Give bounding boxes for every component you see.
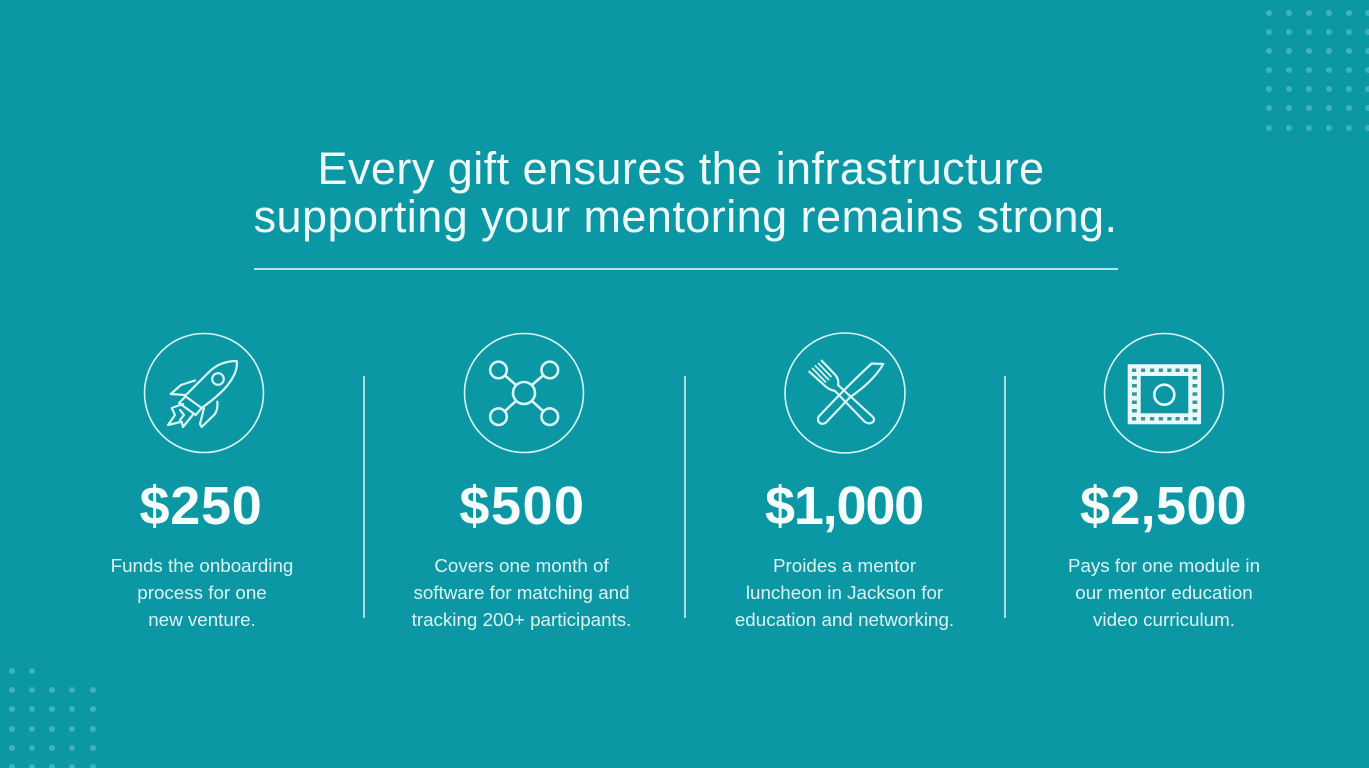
description: $250 bbox=[111, 555, 293, 630]
icon: rocket bbox=[144, 334, 264, 452]
amount: $1,000: $1,000 bbox=[765, 476, 923, 536]
description: $250: new venture. bbox=[148, 609, 256, 630]
description: $500: software for matching and bbox=[413, 582, 630, 603]
dot grid: top right bbox=[1266, 10, 1369, 131]
dot grid: bottom left bbox=[9, 668, 96, 768]
description: $500: Covers one month of bbox=[434, 555, 609, 576]
description: $1,000: luncheon in Jackson for bbox=[746, 582, 943, 603]
icon: network bbox=[464, 334, 584, 452]
amount: $2,500: $2,500 bbox=[1080, 476, 1247, 536]
title: supporting your mentoring remains strong. bbox=[254, 191, 1117, 242]
description: $2,500: Pays for one module in bbox=[1068, 555, 1260, 576]
amount: $500: $500 bbox=[459, 476, 586, 536]
description: $250: Funds the onboarding bbox=[111, 555, 293, 576]
title rule bbox=[254, 268, 1118, 270]
icon: fork and knife bbox=[785, 333, 905, 453]
description: $500 bbox=[412, 555, 631, 630]
description: $2,500: video curriculum. bbox=[1093, 609, 1235, 630]
column divider 2 bbox=[684, 376, 686, 618]
column divider 1 bbox=[363, 376, 365, 618]
description: $500: tracking 200+ participants. bbox=[412, 609, 631, 630]
description: $1,000: education and networking. bbox=[735, 609, 954, 630]
title bbox=[254, 143, 1117, 242]
description: $1,000 bbox=[735, 555, 954, 630]
description: $2,500 bbox=[1068, 555, 1260, 630]
title: Every gift ensures the infrastructure bbox=[318, 143, 1044, 194]
description: $1,000: Proides a mentor bbox=[773, 555, 916, 576]
description: $250: process for one bbox=[137, 582, 267, 603]
icon: film frame bbox=[1104, 334, 1224, 452]
description: $2,500: our mentor education bbox=[1075, 582, 1253, 603]
amount: $250: $250 bbox=[140, 476, 262, 536]
column divider 3 bbox=[1004, 376, 1006, 618]
